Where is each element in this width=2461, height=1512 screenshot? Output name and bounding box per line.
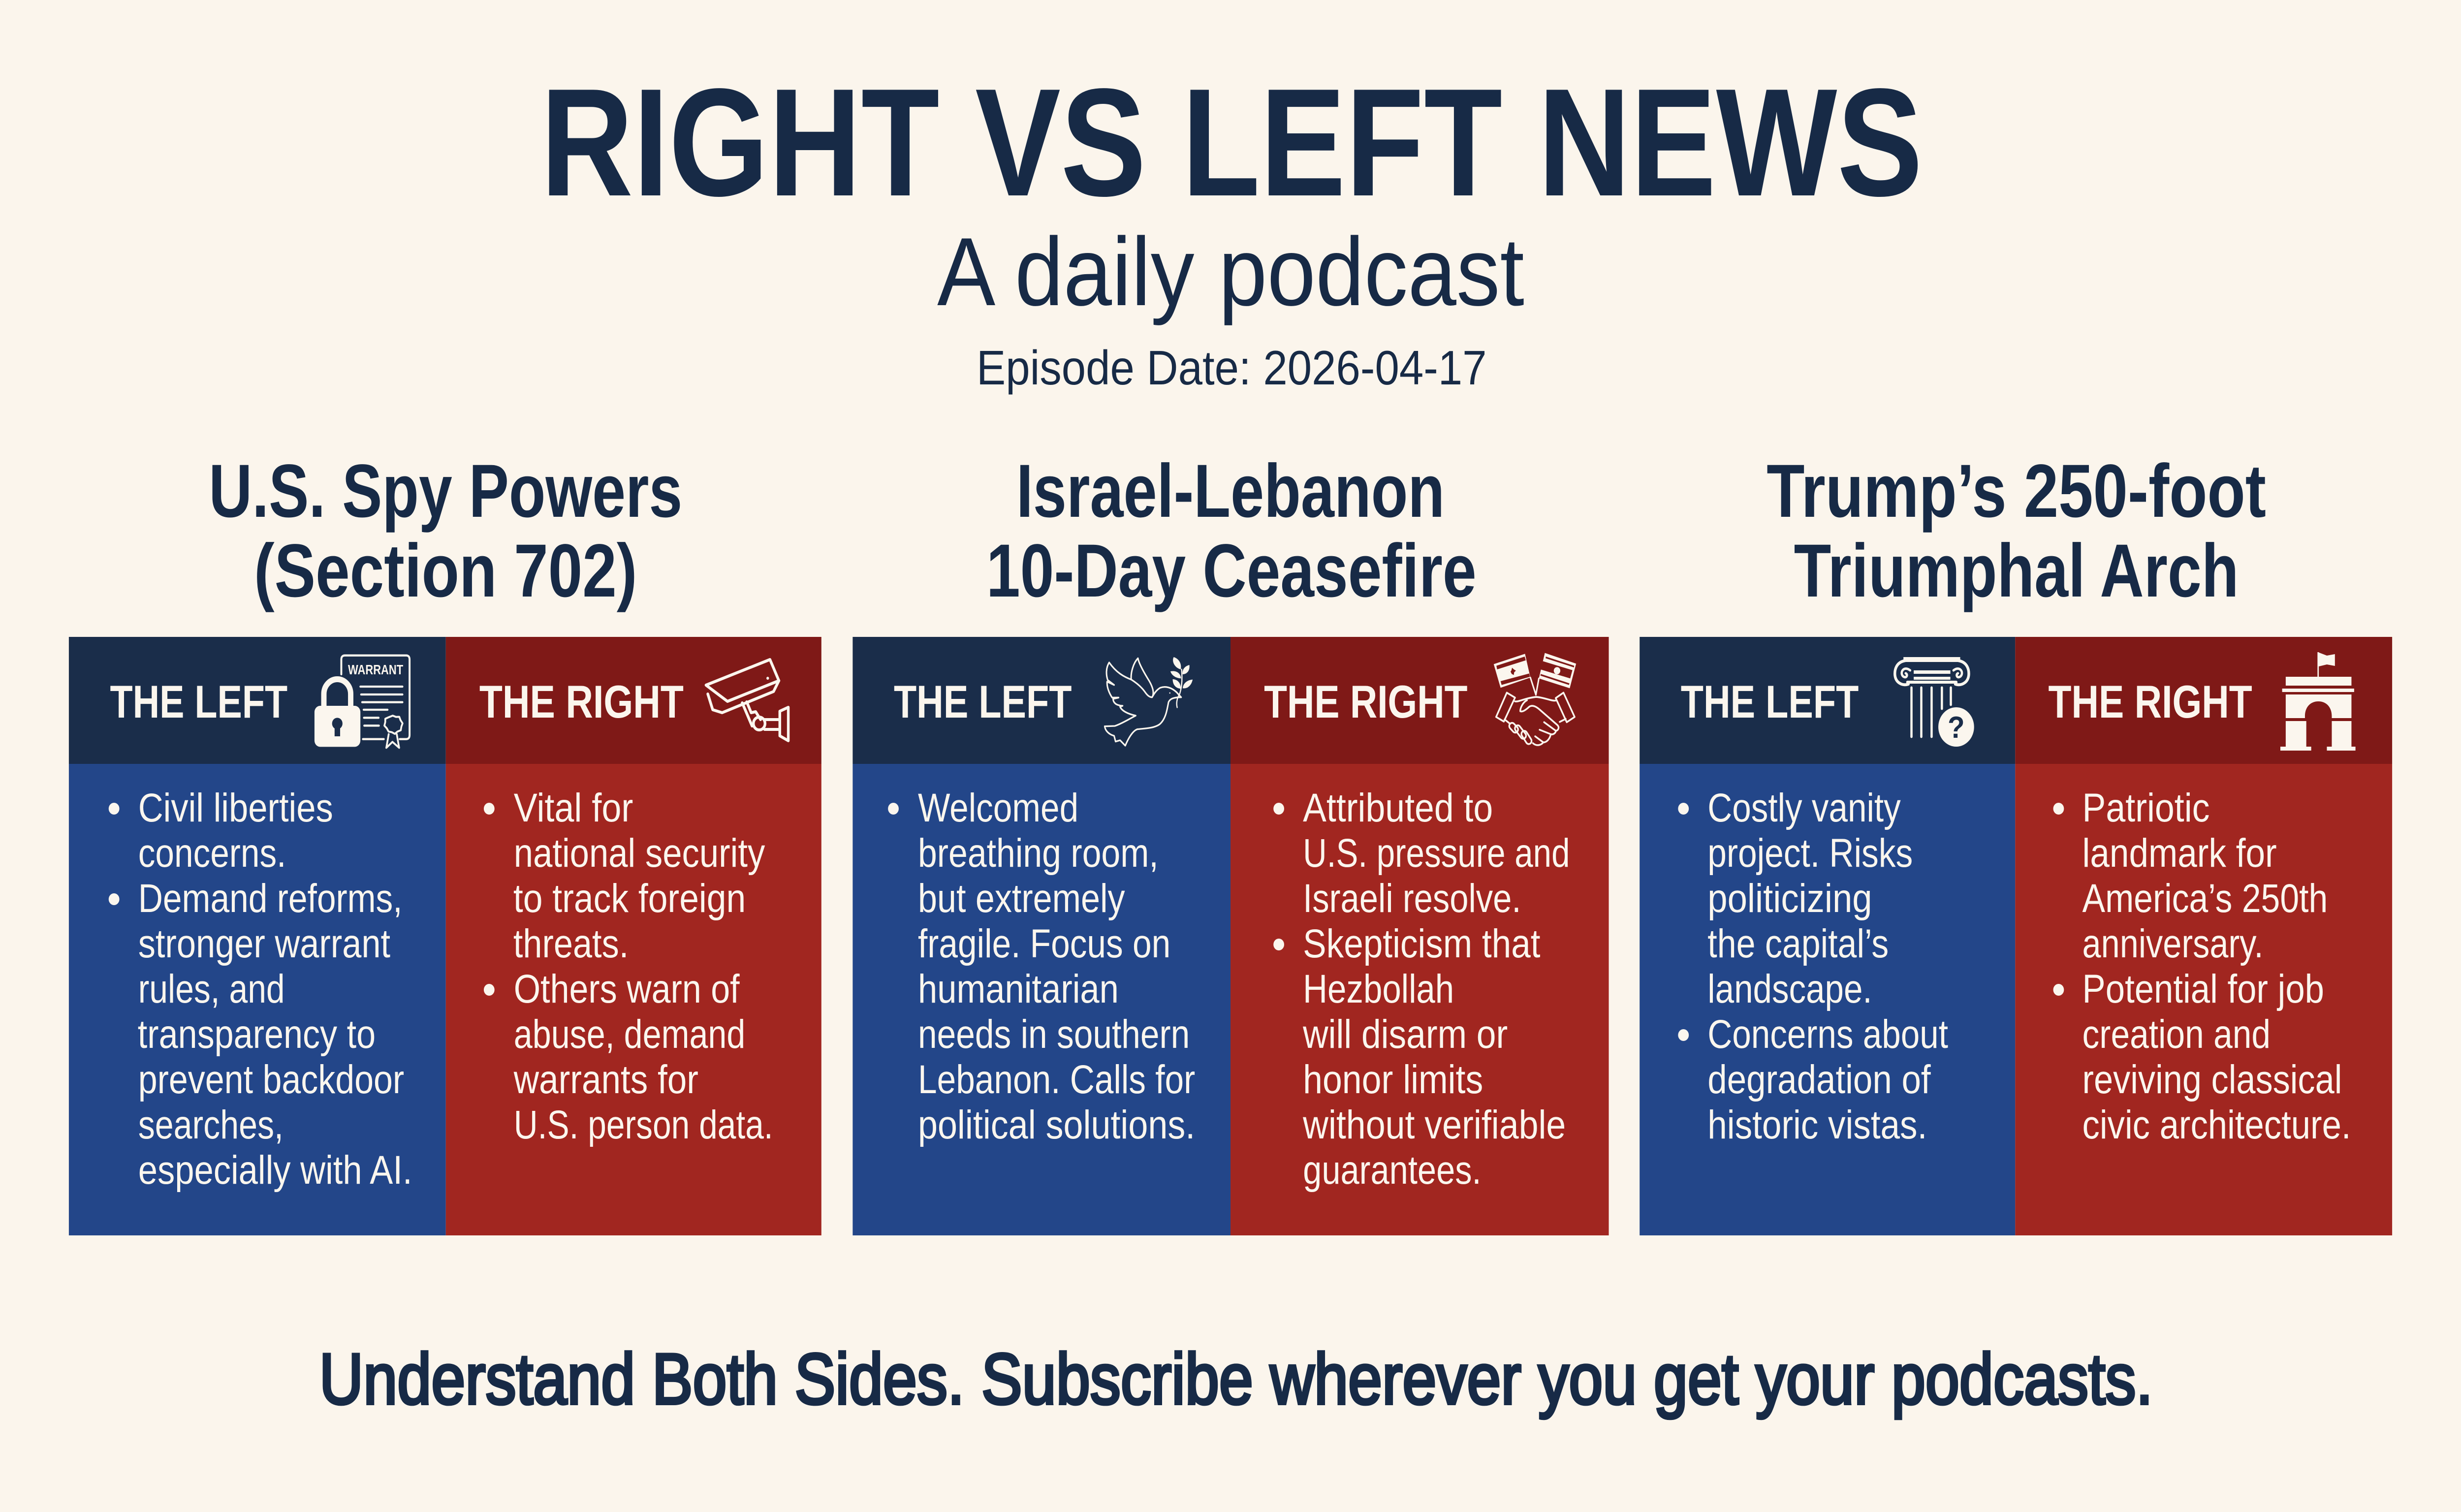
left bullets: fragile. Focus on	[918, 921, 1170, 966]
icon: dove with olive branch	[1104, 657, 1193, 746]
right bullets: Others warn of	[514, 966, 740, 1011]
left body	[852, 764, 1230, 1235]
episode date: Episode Date: 2026-04-17	[977, 341, 1487, 395]
right bullets: national security	[514, 830, 765, 876]
panel: triumphal arch	[1640, 637, 2392, 1235]
left bullets: Demand reforms,	[138, 876, 403, 921]
left bullets: Welcomed	[918, 785, 1078, 830]
left bullets: needs in southern	[918, 1011, 1190, 1057]
right header bar	[1230, 637, 1609, 764]
right bullets	[484, 785, 773, 1147]
right bullets: Attributed to	[1303, 785, 1493, 830]
left header bar	[852, 637, 1230, 764]
left bullets: Costly vanity	[1707, 785, 1901, 830]
right body	[2015, 764, 2392, 1235]
left bullets: humanitarian	[918, 966, 1119, 1011]
left bullets	[109, 785, 412, 1193]
left label: THE LEFT	[894, 676, 1072, 728]
icon: lock and warrant	[315, 656, 410, 748]
right bullets	[1273, 785, 1570, 1193]
left bullets: transparency to	[138, 1011, 376, 1057]
left body	[1640, 764, 2015, 1235]
heading: U.S. Spy Powers	[209, 449, 682, 612]
left label: THE LEFT	[110, 676, 287, 728]
right bullets: Skepticism that	[1303, 921, 1541, 966]
right bullets: Potential for job	[2082, 966, 2324, 1011]
right bullets: anniversary.	[2082, 921, 2263, 966]
left bullets	[1678, 785, 1948, 1147]
left bullets: especially with AI.	[138, 1147, 412, 1193]
right bullets: warrants for	[513, 1057, 698, 1102]
right bullets: honor limits	[1303, 1057, 1483, 1102]
right bullets: reviving classical	[2082, 1057, 2342, 1102]
subtitle: A daily podcast	[937, 218, 1524, 326]
icon: flags and handshake	[1494, 653, 1576, 745]
right header bar	[2015, 637, 2392, 764]
left bullets: politicizing	[1707, 876, 1872, 921]
right bullets: Israeli resolve.	[1303, 876, 1521, 921]
left bullets: landscape.	[1707, 966, 1872, 1011]
right bullets: Hezbollah	[1303, 966, 1454, 1011]
left header bar	[1640, 637, 2015, 764]
left bullets: searches,	[138, 1102, 284, 1147]
icon: lock and warrant: WARRANT	[348, 662, 404, 677]
left bullets: concerns.	[138, 830, 286, 876]
right label: THE RIGHT	[479, 676, 684, 728]
left bullets: breathing room,	[918, 830, 1159, 876]
left bullets: project. Risks	[1707, 830, 1913, 876]
right bullets: guarantees.	[1303, 1147, 1482, 1193]
heading: Israel-Lebanon: Israel-Lebanon	[1016, 449, 1445, 533]
heading: Israel-Lebanon: 10-Day Ceasefire	[986, 529, 1477, 612]
left bullets: political solutions.	[918, 1102, 1195, 1147]
right bullets: U.S. person data.	[514, 1102, 773, 1147]
heading: Trump's arch	[1767, 449, 2266, 612]
left bullets: Lebanon. Calls for	[918, 1057, 1195, 1102]
footer call to action: Understand Both Sides. Subscribe wherever you get your podcasts.	[319, 1339, 2153, 1419]
right bullets: U.S. pressure and	[1303, 830, 1570, 876]
heading: Trump's arch: Triumphal Arch	[1794, 529, 2239, 612]
left bullets: stronger warrant	[138, 921, 390, 966]
right bullets: Vital for	[514, 785, 633, 830]
left bullets: rules, and	[138, 966, 285, 1011]
right bullets: landmark for	[2082, 830, 2277, 876]
left bullets: Civil liberties	[138, 785, 333, 830]
right bullets: will disarm or	[1302, 1011, 1508, 1057]
right bullets: civic architecture.	[2082, 1102, 2351, 1147]
right bullets: America’s 250th	[2082, 876, 2328, 921]
right bullets: abuse, demand	[514, 1011, 745, 1057]
heading: Israel-Lebanon	[986, 449, 1477, 612]
icon: triumphal arch with flag	[2280, 652, 2356, 751]
left bullets: historic vistas.	[1707, 1102, 1927, 1147]
heading: U.S. Spy Powers: U.S. Spy Powers	[209, 449, 682, 533]
heading: Trump's arch: Trump’s 250-foot	[1767, 449, 2266, 533]
left header bar	[69, 637, 446, 764]
left label: THE LEFT	[1681, 676, 1859, 728]
right bullets	[2053, 785, 2351, 1147]
icon: column with question mark	[1895, 657, 1974, 747]
left bullets: but extremely	[918, 876, 1125, 921]
panel: ceasefire	[852, 637, 1609, 1235]
icon: security camera	[706, 660, 789, 741]
left body	[69, 764, 446, 1235]
left bullets: degradation of	[1707, 1057, 1931, 1102]
right body	[1230, 764, 1609, 1235]
left bullets: the capital’s	[1707, 921, 1889, 966]
panel: spy powers	[69, 637, 821, 1235]
right header bar	[446, 637, 821, 764]
right label: THE RIGHT	[1264, 676, 1467, 728]
heading: U.S. Spy Powers: (Section 702)	[254, 529, 637, 612]
left bullets: prevent backdoor	[138, 1057, 404, 1102]
right label: THE RIGHT	[2049, 676, 2252, 728]
right body	[446, 764, 821, 1235]
left bullets	[888, 785, 1195, 1147]
left bullets: Concerns about	[1707, 1011, 1948, 1057]
right bullets: to track foreign	[513, 876, 746, 921]
title: RIGHT VS LEFT NEWS	[540, 57, 1923, 228]
right bullets: Patriotic	[2082, 785, 2209, 830]
right bullets: threats.	[513, 921, 629, 966]
icon: column with question mark: ?	[1948, 710, 1965, 745]
right bullets: creation and	[2082, 1011, 2271, 1057]
right bullets: without verifiable	[1302, 1102, 1566, 1147]
